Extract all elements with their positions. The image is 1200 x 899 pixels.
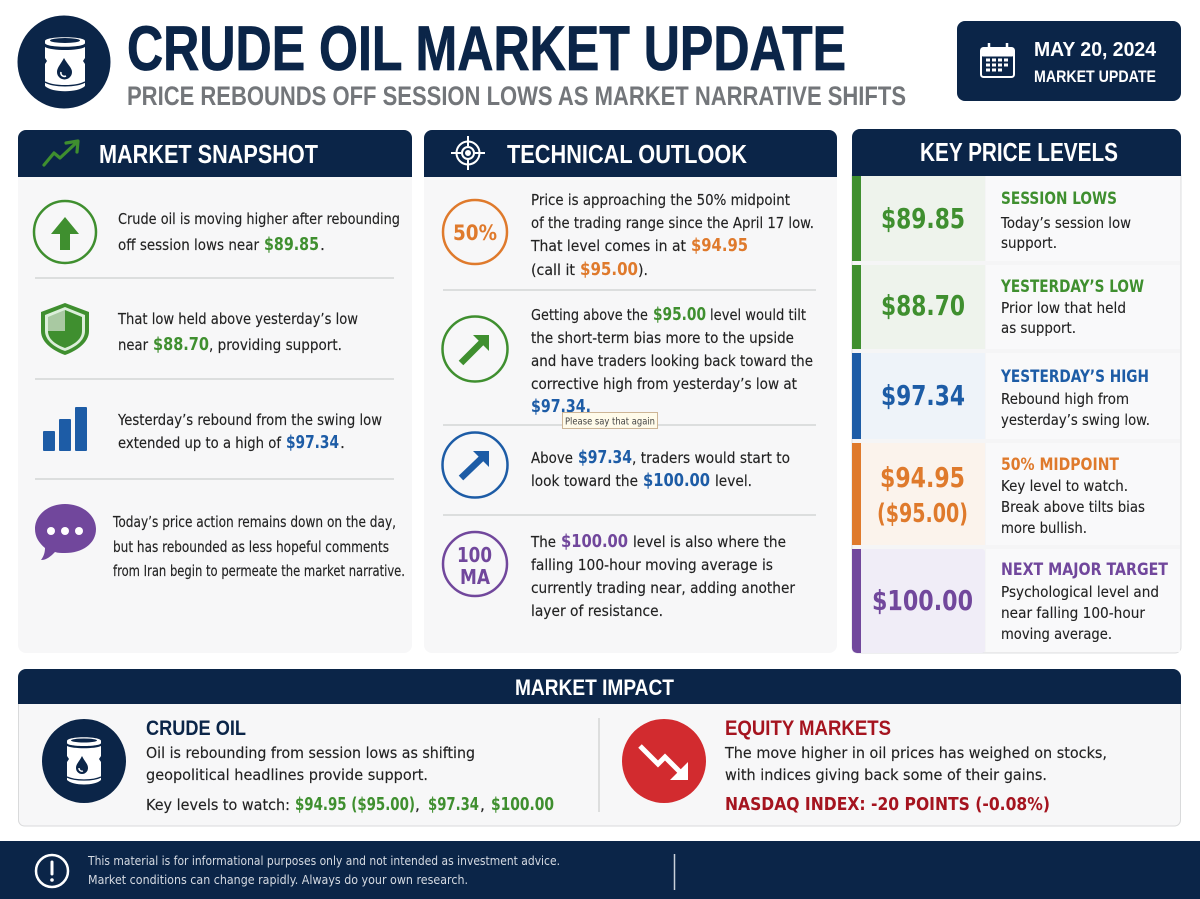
level: session lows: Today’s session low — [1000, 214, 1131, 232]
tooltip: Please say that again — [565, 416, 655, 428]
footer — [0, 841, 1200, 899]
row: swing high: extended up to a high of — [118, 434, 281, 452]
badge label: MARKET UPDATE — [1034, 67, 1156, 86]
row: narrative: Today’s price action remains down on the day, — [112, 513, 396, 531]
level: next major target: NEXT MAJOR TARGET — [1001, 560, 1168, 580]
icon: falling arrow — [622, 719, 706, 803]
row: moving average — [443, 531, 796, 620]
row: moving average: The — [530, 533, 556, 551]
heading: KEY PRICE LEVELS — [920, 137, 1118, 167]
row: above high — [442, 432, 790, 498]
row: rebound: . — [320, 236, 325, 254]
icon: up arrow — [34, 201, 96, 263]
row: upside bias — [442, 304, 813, 417]
row: swing high: $97.34 — [286, 432, 339, 453]
level: yesterday's low: YESTERDAY’S LOW — [1000, 277, 1144, 297]
row: upside bias: level would tilt — [710, 306, 806, 324]
row: narrative: but has rebounded as less hopeful comments — [113, 538, 389, 556]
crude oil impact: Key levels to watch: — [146, 796, 290, 814]
level: 50 percent midpoint: Key level to watch. — [1001, 477, 1128, 495]
row: above high: Above — [531, 449, 573, 467]
row: rebound: Crude oil is moving higher after rebounding — [118, 210, 400, 228]
row: swing high: . — [340, 434, 345, 452]
equity markets impact: The move higher in oil prices has weighed on stocks, — [724, 744, 1107, 762]
level: session lows — [852, 176, 1180, 261]
row: support — [41, 303, 358, 355]
row: above high: , traders would start to — [632, 449, 790, 467]
icon: target — [451, 136, 485, 170]
disclaimer: Market conditions can change rapidly. Always do your own research. — [88, 872, 468, 887]
icon: oil barrel — [18, 16, 110, 108]
heading: MARKET IMPACT — [515, 675, 674, 700]
crude oil impact: , — [480, 796, 485, 814]
equity markets impact: with indices giving back some of their gains. — [725, 766, 1047, 784]
row: support: That low held above yesterday’s low — [117, 310, 358, 328]
panel: market impact — [18, 669, 1181, 826]
heading: MARKET SNAPSHOT — [99, 139, 318, 169]
icon: blue diagonal arrow — [442, 432, 508, 498]
crude oil impact: , — [415, 796, 420, 814]
equity markets impact — [622, 717, 1107, 815]
level: 50 percent midpoint: more bullish. — [1001, 519, 1087, 537]
level: 50 percent midpoint — [852, 443, 1180, 545]
row: upside bias: the short-term bias more to the upside — [531, 329, 794, 347]
crude oil impact: geopolitical headlines provide support. — [146, 766, 428, 784]
row: rebound: off session lows near — [118, 236, 260, 254]
row: upside bias: $95.00 — [653, 304, 706, 325]
level: next major target — [852, 549, 1180, 653]
level: yesterday's high: YESTERDAY’S HIGH — [1000, 367, 1149, 387]
row: above high: $100.00 — [643, 470, 710, 491]
disclaimer — [87, 853, 560, 887]
crude oil impact — [42, 717, 554, 815]
row: rebound: $89.85 — [264, 234, 319, 255]
level: session lows: $89.85 — [881, 203, 965, 235]
level: session lows: SESSION LOWS — [1001, 189, 1117, 209]
level: yesterday's high — [852, 353, 1180, 439]
subtitle: PRICE REBOUNDS OFF SESSION LOWS AS MARKET NARRATIVE SHIFTS — [127, 81, 906, 111]
level: 50 percent midpoint: $94.95 — [880, 462, 965, 494]
icon: oil barrel — [42, 719, 126, 803]
crude oil impact: CRUDE OIL — [146, 717, 246, 740]
icon: shield — [41, 303, 89, 355]
crude oil impact: $97.34 — [428, 794, 479, 815]
row: moving average: $100.00 — [561, 531, 628, 552]
row: moving average: level is also where the — [633, 533, 786, 551]
equity markets impact: NASDAQ INDEX: -20 POINTS (-0.08%) — [725, 794, 1050, 815]
title: CRUDE OIL MARKET UPDATE — [127, 14, 846, 84]
panel: technical outlook — [424, 130, 837, 653]
level: yesterday's low: $88.70 — [881, 290, 965, 322]
row: midpoint: ). — [638, 261, 648, 279]
date badge — [957, 21, 1181, 101]
icon: 100 MA: 100 — [457, 543, 492, 567]
row: midpoint: $95.00 — [580, 259, 638, 280]
level: 50 percent midpoint: 50% MIDPOINT — [1001, 455, 1119, 475]
level: yesterday's high: yesterday’s swing low. — [1001, 411, 1150, 429]
row: support: $88.70 — [153, 334, 209, 355]
icon: speech bubble — [35, 504, 96, 560]
tooltip — [562, 412, 658, 428]
icon: green diagonal arrow — [442, 316, 508, 382]
crude oil impact: Oil is rebounding from session lows as shifting — [146, 744, 475, 762]
level: yesterday's low — [852, 265, 1180, 349]
icon: exclamation — [36, 855, 68, 887]
disclaimer: This material is for informational purposes only and not intended as investment advice. — [87, 853, 560, 868]
row: swing high: Yesterday’s rebound from the swing low — [117, 411, 382, 429]
row: midpoint: Price is approaching the 50% midpoint — [531, 191, 790, 209]
row: above high: $97.34 — [578, 447, 632, 468]
panel: market snapshot — [18, 130, 412, 653]
level: yesterday's low: Prior low that held — [1001, 299, 1126, 317]
level: next major target: near falling 100-hour — [1001, 604, 1146, 622]
row: moving average: falling 100-hour moving average is — [531, 556, 773, 574]
crude oil impact: $94.95 ($95.00) — [295, 794, 415, 815]
level: session lows: support. — [1001, 234, 1057, 252]
row: upside bias: Getting above the — [531, 306, 648, 324]
equity markets impact: EQUITY MARKETS — [725, 717, 891, 740]
row: midpoint — [443, 191, 814, 280]
icon: 100 MA: MA — [460, 565, 490, 589]
row: upside bias: corrective high from yesterday’s low at — [531, 375, 797, 393]
level: yesterday's high: $97.34 — [881, 380, 965, 412]
icon: trend arrow — [44, 141, 78, 165]
row: midpoint: That level comes in at — [530, 237, 686, 255]
row: midpoint: $94.95 — [691, 235, 748, 256]
panel: key price levels — [852, 129, 1181, 653]
row: swing high — [43, 407, 382, 453]
level: yesterday's low: as support. — [1001, 319, 1076, 337]
crude oil impact: $100.00 — [491, 794, 554, 815]
row: support: , providing support. — [209, 336, 342, 354]
icon: calendar — [981, 43, 1014, 77]
row: support: near — [118, 336, 149, 354]
level: 50 percent midpoint: Break above tilts bias — [1001, 498, 1145, 516]
row: moving average: layer of resistance. — [531, 602, 663, 620]
row: rebound — [34, 201, 400, 263]
row: narrative: from Iran begin to permeate the market narrative. — [113, 562, 405, 580]
icon: 100 MA — [443, 532, 507, 596]
header — [18, 14, 1181, 111]
icon: 50 percent — [443, 200, 507, 264]
level: next major target: Psychological level and — [1001, 583, 1159, 601]
row: above high: level. — [715, 472, 752, 490]
row: moving average: currently trading near, adding another — [531, 579, 796, 597]
level: next major target: $100.00 — [872, 585, 973, 617]
date: MAY 20, 2024 — [1034, 39, 1157, 61]
level: 50 percent midpoint: ($95.00) — [877, 499, 968, 529]
row: upside bias: $97.34. — [531, 396, 591, 417]
row: upside bias: and have traders looking back toward the — [531, 352, 813, 370]
row: narrative — [35, 504, 405, 580]
heading: TECHNICAL OUTLOOK — [507, 139, 747, 169]
row: midpoint: (call it — [531, 261, 575, 279]
level: yesterday's high: Rebound high from — [1001, 390, 1129, 408]
icon: bar chart — [43, 407, 87, 451]
icon: 50 percent: 50% — [453, 221, 497, 245]
level: next major target: moving average. — [1001, 625, 1112, 643]
row: above high: look toward the — [531, 472, 638, 490]
row: midpoint: of the trading range since the April 17 low. — [531, 214, 814, 232]
